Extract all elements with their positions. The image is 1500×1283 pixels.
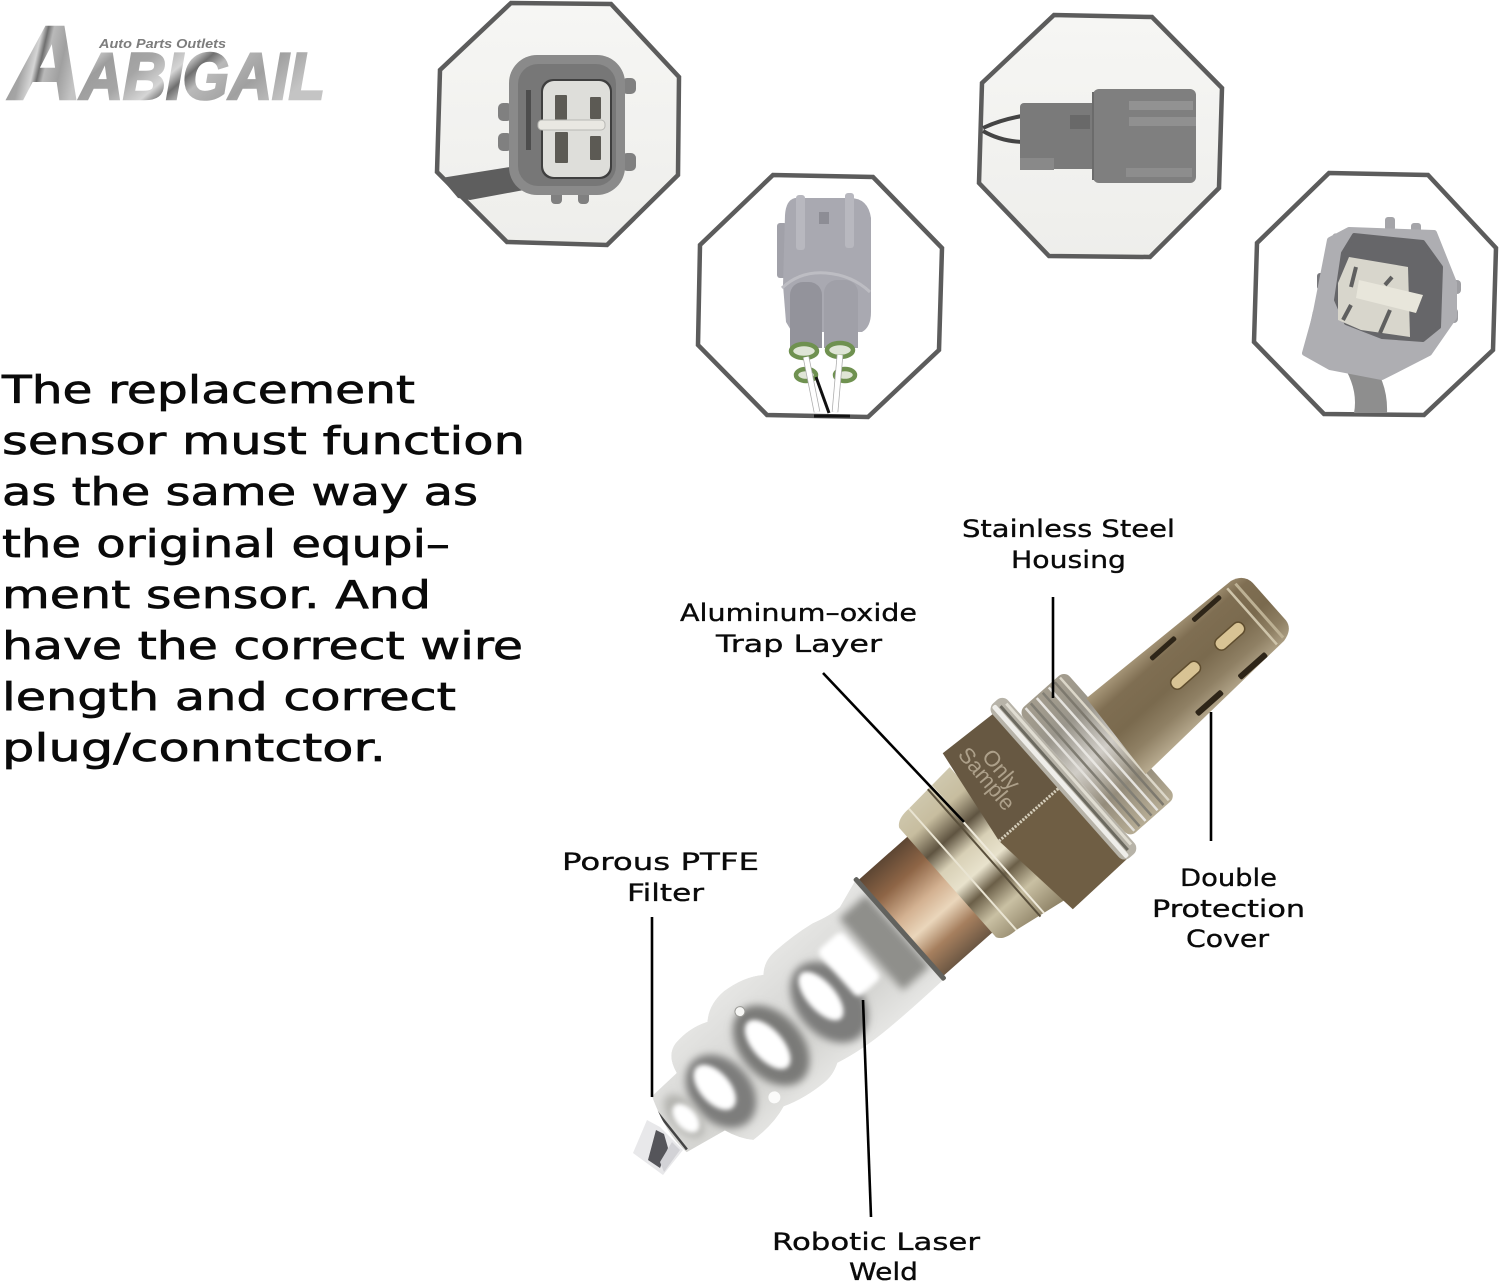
photo panel: connector angled view <box>1254 173 1496 415</box>
protection cover <box>1082 565 1301 774</box>
photo panel: connector rear view with seals <box>698 175 942 417</box>
connector housing <box>777 193 871 332</box>
hex nut <box>931 702 1135 916</box>
pins <box>1343 267 1392 333</box>
leader line: porous PTFE filter <box>651 917 653 1097</box>
paragraph: replacement sensor: sensor must function <box>2 419 525 463</box>
hex stamp text: Sample <box>953 742 1020 815</box>
paragraph: replacement sensor: The replacement <box>1 368 415 412</box>
label: stainless steel housing: Housing <box>1011 546 1126 574</box>
label: aluminum-oxide trap layer <box>680 599 917 658</box>
label: aluminum-oxide trap layer: Trap Layer <box>715 630 882 658</box>
paragraph: replacement sensor: the original equpi– <box>2 522 450 566</box>
logo tagline: Auto Parts Outlets <box>98 36 226 51</box>
label: porous PTFE filter: Filter <box>627 879 704 907</box>
wires <box>806 355 850 416</box>
wires <box>983 116 1022 142</box>
cable <box>441 167 524 200</box>
leader line: double protection cover <box>1210 712 1212 841</box>
connector housing <box>498 55 636 204</box>
connector housing <box>1305 217 1461 377</box>
sensor photo <box>633 578 1289 1175</box>
photo panel: connector side view <box>979 15 1222 257</box>
thread <box>1018 671 1176 838</box>
green seals <box>791 343 855 381</box>
label: porous PTFE filter <box>562 848 759 907</box>
paragraph: replacement sensor: as the same way as <box>2 470 478 514</box>
label: double protection cover: Cover <box>1186 925 1269 953</box>
logo big letter A: A <box>7 6 82 122</box>
sleeves <box>790 280 858 350</box>
label: robotic laser weld <box>772 1228 980 1283</box>
label: stainless steel housing <box>962 515 1175 574</box>
leader line: robotic laser weld <box>863 1000 871 1217</box>
label: porous PTFE filter: Porous PTFE <box>562 848 759 876</box>
copper section <box>856 834 995 978</box>
shield flange <box>853 876 947 981</box>
paragraph: replacement sensor: have the correct wire <box>2 624 523 668</box>
gold collar <box>891 767 1066 951</box>
paragraph: replacement sensor: ment sensor. And <box>2 573 431 617</box>
label: robotic laser weld: Robotic Laser <box>772 1228 980 1256</box>
cable <box>1346 370 1387 413</box>
slots <box>1147 594 1271 717</box>
label: double protection cover: Protection <box>1152 895 1305 923</box>
paragraph: replacement sensor: length and correct <box>2 675 456 719</box>
sensor tip <box>633 1120 683 1175</box>
hex stamp text: Only <box>977 744 1025 795</box>
pins <box>555 95 601 163</box>
photo panel: connector front view <box>437 3 679 245</box>
cross bar <box>538 120 605 130</box>
white insert <box>1338 257 1410 337</box>
connector body <box>1020 89 1196 183</box>
logo wordmark: ABIGAIL <box>78 39 325 113</box>
shield ribs <box>652 882 942 1152</box>
leader line: stainless steel housing <box>1052 597 1054 698</box>
paragraph: replacement sensor: plug/conntctor. <box>2 726 386 770</box>
label: aluminum-oxide trap layer: Aluminum–oxide <box>680 599 917 627</box>
label: double protection cover: Double <box>1180 864 1277 892</box>
logo: Aabigail <box>7 6 325 122</box>
washer <box>987 695 1140 863</box>
label: stainless steel housing: Stainless Steel <box>962 515 1175 543</box>
label: double protection cover <box>1152 864 1305 953</box>
paragraph: replacement sensor <box>1 368 525 770</box>
leader line: aluminum-oxide trap layer <box>823 673 964 822</box>
tab <box>1356 280 1423 313</box>
